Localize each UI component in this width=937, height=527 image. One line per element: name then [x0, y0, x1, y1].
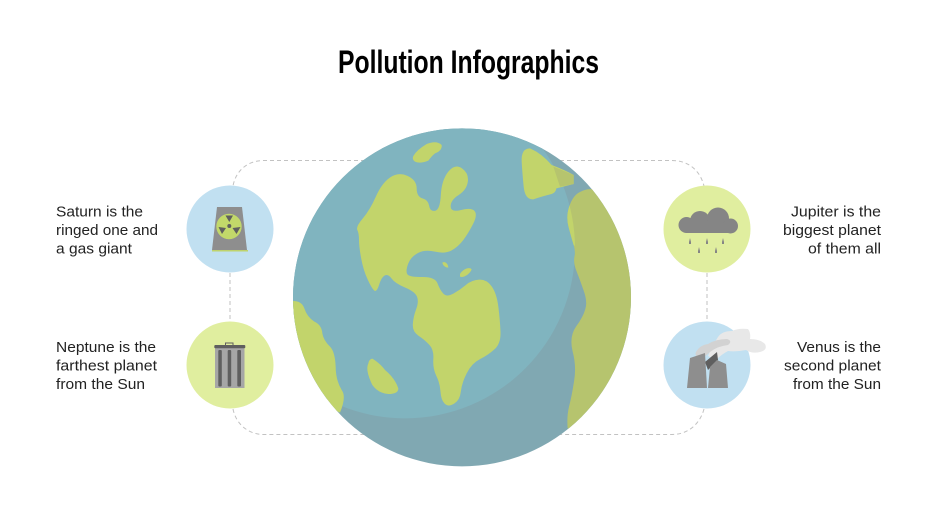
west land — [293, 301, 344, 412]
northeast land — [522, 148, 574, 199]
text: Venus: Venus is the — [797, 339, 881, 356]
globe — [293, 128, 631, 466]
text: Venus: second planet — [784, 358, 882, 374]
ocean highlight — [293, 128, 574, 418]
americas — [357, 166, 501, 405]
text: Neptune: Neptune is the — [56, 339, 156, 356]
panel: Saturn — [186, 186, 274, 272]
east continent highlight — [567, 206, 575, 246]
icon: factory with smoke — [687, 329, 766, 388]
title: Pollution Infographics — [338, 44, 599, 80]
panel: Venus — [664, 322, 766, 408]
text: Neptune: farthest planet — [56, 358, 158, 374]
icon: rain cloud — [678, 208, 738, 253]
text: Venus — [784, 339, 882, 393]
icon: nuclear plant — [212, 207, 248, 252]
text: Jupiter — [783, 204, 882, 258]
text: Jupiter: of them all — [808, 240, 881, 258]
panel: Neptune — [186, 322, 274, 408]
circle — [664, 322, 750, 408]
northeast land shadow — [553, 167, 574, 187]
northern island — [413, 142, 442, 163]
text: Jupiter: Jupiter is the — [791, 204, 881, 220]
text: Neptune — [56, 339, 158, 393]
circle — [186, 186, 274, 272]
text: Saturn: a gas giant — [56, 240, 133, 258]
east continent — [567, 189, 631, 428]
text: Venus: from the Sun — [793, 376, 881, 393]
pacific island — [367, 359, 398, 394]
text: Jupiter: biggest planet — [783, 222, 882, 239]
caribbean islands — [442, 262, 472, 277]
icon: trash can — [214, 343, 245, 388]
text: Saturn — [56, 204, 158, 258]
text: Neptune: from the Sun — [56, 376, 145, 393]
dashed connector — [230, 160, 707, 434]
circle — [186, 322, 274, 408]
panel: Jupiter — [664, 186, 750, 272]
text: Saturn: ringed one and — [56, 222, 158, 239]
text: Saturn: Saturn is the — [56, 204, 143, 220]
circle — [664, 186, 750, 272]
